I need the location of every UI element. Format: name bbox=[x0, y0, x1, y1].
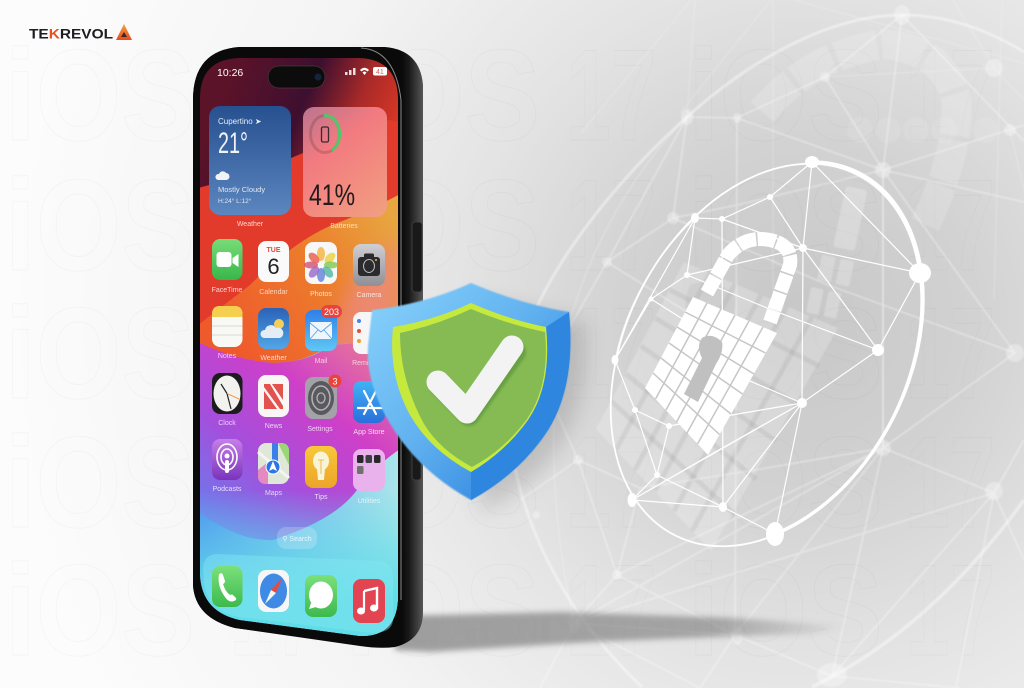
status bar: 41 bbox=[376, 69, 384, 76]
watermark: repeated iOS 17 outline text: 17 bbox=[566, 537, 656, 683]
status bar bbox=[217, 67, 387, 79]
app: Reminders: Reminders bbox=[352, 360, 386, 367]
watermark: repeated iOS 17 outline text: 17 bbox=[230, 537, 318, 683]
dock bbox=[203, 554, 393, 633]
watermark: repeated iOS 17 outline text: iOS bbox=[688, 409, 883, 555]
watermark: repeated iOS 17 outline text: 17 bbox=[230, 409, 318, 555]
TekRevol logo: TEKREVOL bbox=[29, 26, 113, 42]
watermark: repeated iOS 17 outline text: iOS bbox=[5, 280, 195, 426]
app: FaceTime bbox=[212, 239, 243, 294]
watermark: repeated iOS 17 outline text: iOS bbox=[5, 152, 195, 298]
weather widget: Cupertino ➤ bbox=[218, 117, 262, 126]
app: Calendar: Calendar bbox=[259, 289, 288, 296]
watermark: repeated iOS 17 outline text: 17 bbox=[566, 152, 656, 298]
app: News bbox=[258, 375, 289, 430]
watermark: repeated iOS 17 outline text: iOS bbox=[345, 537, 540, 683]
outer ring bbox=[509, 15, 1024, 687]
watermark: repeated iOS 17 outline text: 17 bbox=[566, 280, 656, 426]
watermark: repeated iOS 17 outline text: 17 bbox=[566, 22, 656, 168]
app: Notes bbox=[212, 306, 242, 360]
app: Settings: 3 bbox=[332, 376, 338, 386]
watermark: repeated iOS 17 outline text: 17 bbox=[230, 22, 318, 168]
metal rim highlight bbox=[361, 48, 401, 600]
app: Photos: Photos bbox=[310, 291, 332, 298]
shield green face bbox=[400, 309, 546, 467]
app: FaceTime: FaceTime bbox=[212, 287, 243, 294]
lock tile grid bbox=[653, 303, 766, 444]
padlock made of white tiles bbox=[645, 239, 790, 455]
app: Weather: Weather bbox=[260, 355, 287, 362]
weather widget: Weather bbox=[237, 221, 264, 228]
app: Safari bbox=[258, 570, 289, 612]
app: Weather bbox=[258, 308, 289, 362]
app: App Store bbox=[353, 381, 385, 436]
dynamic island bbox=[268, 66, 325, 88]
app: Podcasts bbox=[212, 439, 242, 493]
shield blue right face bbox=[471, 312, 570, 500]
batteries widget bbox=[303, 107, 387, 230]
watermark: repeated iOS 17 outline text: iOS bbox=[688, 152, 883, 298]
watermark: repeated iOS 17 outline text: iOS bbox=[688, 22, 883, 168]
outer connection lines bbox=[520, 15, 1024, 688]
app: Notes: Notes bbox=[218, 353, 237, 360]
app: Tips bbox=[305, 446, 337, 501]
app: Podcasts: Podcasts bbox=[213, 486, 242, 493]
batteries widget: 41% bbox=[309, 179, 355, 212]
app: Maps: Maps bbox=[265, 490, 283, 497]
watermark: repeated iOS 17 outline text: iOS bbox=[345, 409, 540, 555]
ghost keyhole bbox=[662, 282, 735, 410]
largest network lines bbox=[581, 0, 1024, 448]
watermark: repeated iOS 17 outline text: iOS bbox=[5, 409, 195, 555]
search pill: ⚲ Search bbox=[282, 535, 312, 543]
watermark: repeated iOS 17 outline text: iOS bbox=[345, 22, 540, 168]
app: Phone bbox=[212, 566, 242, 607]
shield inner lime rim bbox=[392, 303, 547, 472]
app: Clock bbox=[212, 373, 242, 427]
check mark bbox=[438, 347, 512, 412]
watermark: repeated iOS 17 outline text: 17 bbox=[230, 280, 318, 426]
app: Mail: 203 bbox=[324, 307, 339, 317]
keyhole bbox=[684, 336, 722, 402]
network ring with nodes bbox=[549, 111, 983, 599]
app: Mail bbox=[305, 305, 342, 365]
app: Utilities folder bbox=[353, 449, 385, 505]
app: Reminders bbox=[352, 312, 386, 367]
ghost dark seams bbox=[611, 273, 819, 531]
security shield with check mark bbox=[368, 283, 570, 500]
weather widget: 21° bbox=[218, 127, 248, 160]
ground shadow under phone bbox=[395, 612, 847, 652]
search pill bbox=[277, 527, 317, 549]
lock body bbox=[645, 297, 777, 455]
app: Messages bbox=[305, 575, 337, 617]
watermark: repeated iOS 17 outline text: iOS bbox=[5, 22, 195, 168]
shield outer blue bbox=[368, 283, 570, 500]
lock shackle bbox=[707, 239, 790, 322]
ghost shackle tiles bbox=[762, 44, 956, 225]
app: Settings bbox=[305, 374, 342, 433]
app: Tips: Tips bbox=[315, 494, 328, 501]
app: Music bbox=[353, 579, 385, 623]
wallpaper bbox=[198, 56, 400, 640]
weather widget: Mostly Cloudy bbox=[218, 185, 265, 194]
watermark: repeated iOS 17 outline text: iOS bbox=[345, 280, 540, 426]
app: Calendar bbox=[258, 241, 289, 296]
app: Maps bbox=[258, 443, 289, 497]
side buttons bbox=[412, 222, 422, 480]
app: Utilities folder: Utilities bbox=[358, 498, 381, 505]
check mark shadow bbox=[441, 352, 515, 415]
app: Calendar: TUE bbox=[266, 247, 281, 254]
watermark: repeated iOS 17 outline text: 17 bbox=[566, 409, 656, 555]
shield drop shadow bbox=[480, 300, 586, 512]
ghost dots bbox=[847, 117, 998, 143]
app: Photos bbox=[304, 242, 338, 298]
smartphone bbox=[193, 47, 423, 648]
phone body bbox=[193, 47, 423, 648]
watermark: repeated iOS 17 outline text: iOS bbox=[688, 280, 883, 426]
outer nodes bbox=[532, 5, 1024, 687]
app: Camera: Camera bbox=[357, 292, 382, 299]
app: Calendar: 6 bbox=[267, 254, 280, 279]
app: Clock: Clock bbox=[218, 420, 236, 427]
watermark: repeated iOS 17 outline text: iOS bbox=[688, 537, 883, 683]
batteries widget: Batteries bbox=[330, 223, 358, 230]
app: Mail: Mail bbox=[315, 358, 328, 365]
ghost inner blocks bbox=[806, 183, 869, 320]
ghost lock body bbox=[596, 262, 838, 551]
TekRevol logo bbox=[29, 24, 132, 42]
app: App Store: App Store bbox=[353, 429, 385, 436]
front bezel bbox=[193, 47, 402, 645]
watermark: repeated iOS 17 outline text: iOS bbox=[5, 537, 195, 683]
watermark: repeated iOS 17 outline text: iOS bbox=[345, 152, 540, 298]
weather widget bbox=[209, 106, 291, 228]
watermark: repeated iOS 17 outline text: 17 bbox=[230, 152, 318, 298]
app: Camera bbox=[353, 244, 385, 299]
ghost padlock behind network bbox=[596, 44, 998, 551]
status bar: 10:26 bbox=[217, 67, 243, 79]
weather widget: H:24° L:12° bbox=[218, 197, 252, 205]
app: Settings: Settings bbox=[307, 426, 333, 433]
faded outer network globe bbox=[509, 0, 1024, 688]
app: News: News bbox=[265, 423, 283, 430]
